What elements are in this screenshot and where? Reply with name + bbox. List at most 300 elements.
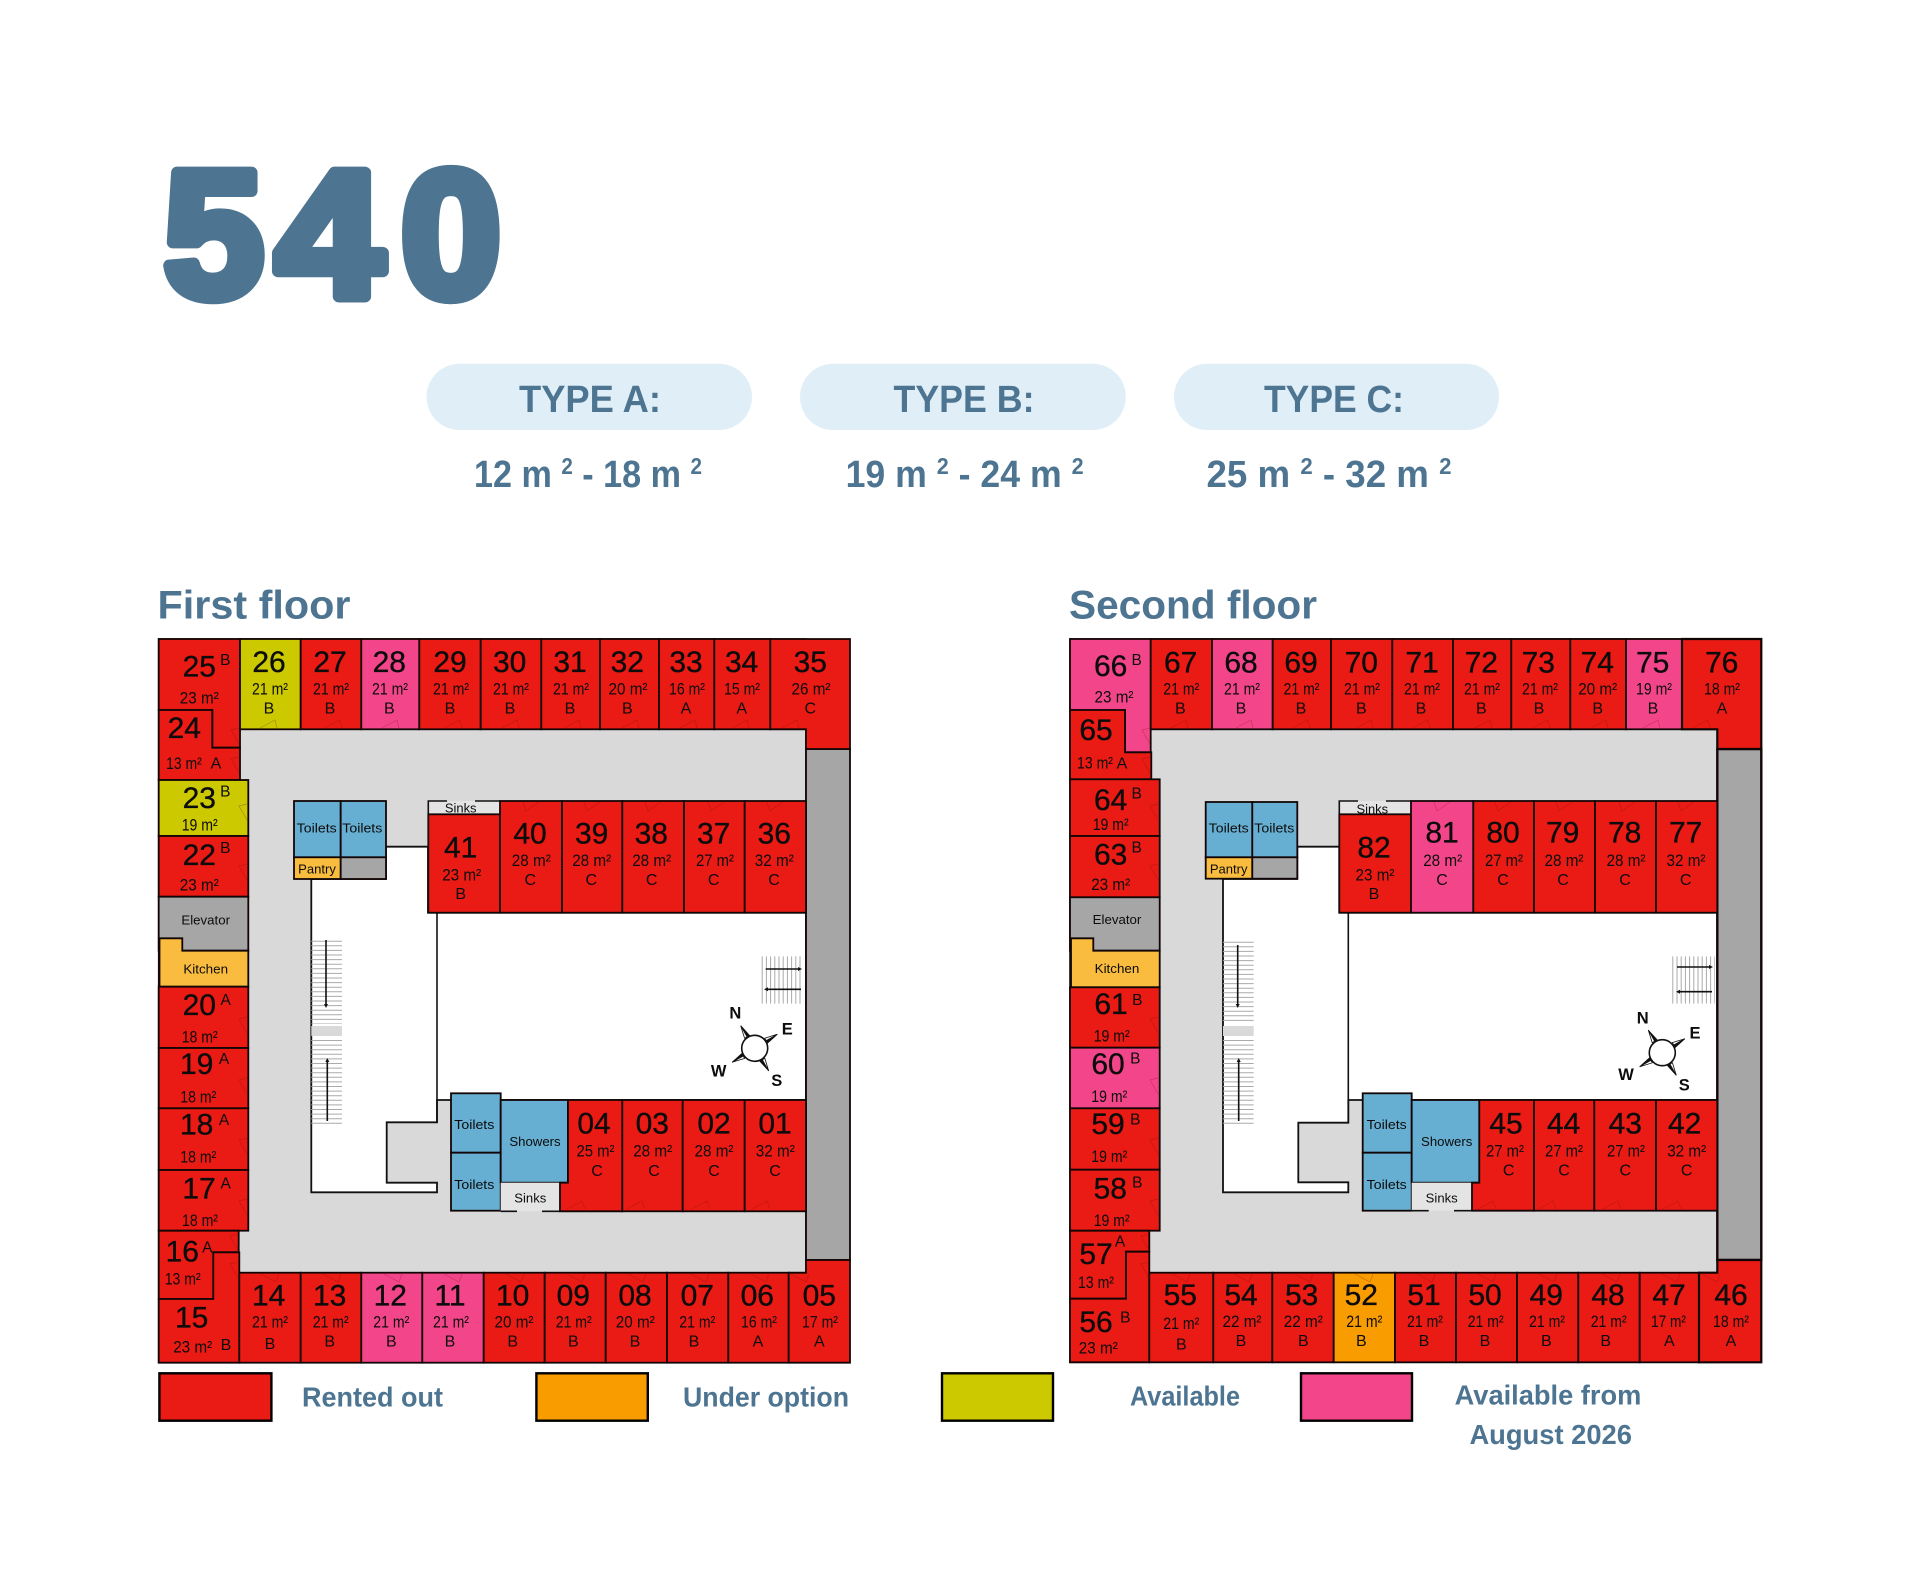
room 73 xyxy=(1511,639,1570,729)
sinks north: Sinks xyxy=(1356,801,1389,816)
room 38: C xyxy=(646,872,657,889)
room 36: C xyxy=(768,872,780,889)
door marks xyxy=(1141,720,1720,1282)
room 47: 17 m² xyxy=(1651,1312,1686,1331)
room 57: A xyxy=(1115,1234,1126,1251)
room 58: 58 xyxy=(1094,1172,1127,1205)
room 82 xyxy=(1339,814,1411,913)
room 20 xyxy=(159,987,248,1048)
room 63: 23 m² xyxy=(1091,875,1130,894)
room 40: 28 m² xyxy=(512,851,551,870)
compass: N xyxy=(1637,1009,1649,1027)
left stairs xyxy=(311,940,342,1124)
room 17 xyxy=(159,1170,248,1231)
room 36 xyxy=(745,801,806,913)
room 71: 21 m² xyxy=(1404,679,1440,698)
room 29: B xyxy=(445,700,455,717)
room 76 xyxy=(1682,639,1761,749)
courtyard xyxy=(1223,847,1717,1192)
room 39 xyxy=(562,801,622,913)
room 07 xyxy=(667,1273,728,1363)
room 44: 27 m² xyxy=(1545,1142,1583,1161)
room 66: 66 xyxy=(1094,650,1127,683)
sinks north xyxy=(1339,801,1411,825)
room 73: 21 m² xyxy=(1522,679,1558,698)
room 41 xyxy=(428,814,500,913)
room 82: 82 xyxy=(1357,831,1391,864)
room 65 xyxy=(1070,710,1151,779)
room 26: B xyxy=(264,700,274,717)
room 76: A xyxy=(1717,700,1728,717)
room 43 xyxy=(1594,1100,1656,1211)
room 73: 73 xyxy=(1522,647,1555,680)
room 60: 19 m² xyxy=(1091,1087,1128,1106)
room 37: C xyxy=(708,872,719,889)
room 51: 51 xyxy=(1407,1279,1441,1312)
room 53: 53 xyxy=(1285,1279,1318,1312)
elevator: Elevator xyxy=(181,912,231,927)
compass: S xyxy=(771,1072,782,1090)
room 46 xyxy=(1699,1260,1761,1362)
room 15: 15 xyxy=(175,1302,208,1335)
toilets south: Toilets xyxy=(1367,1117,1407,1132)
room 51: 21 m² xyxy=(1407,1312,1443,1331)
room 03: 28 m² xyxy=(633,1142,672,1161)
room 31 xyxy=(541,639,600,729)
room 16: 16 xyxy=(166,1236,199,1269)
room 60 xyxy=(1070,1048,1160,1108)
type B size range: - 24 m xyxy=(949,454,1072,496)
room 64: 19 m² xyxy=(1093,815,1129,834)
heading: second floor: Second floor xyxy=(1069,584,1317,628)
room 66 xyxy=(1070,639,1151,752)
room 51 xyxy=(1395,1273,1456,1362)
compass: S xyxy=(1679,1077,1690,1095)
room 11: B xyxy=(445,1334,455,1351)
room 12: 21 m² xyxy=(373,1313,410,1332)
room 33: A xyxy=(681,700,692,717)
room 34: 34 xyxy=(725,646,758,679)
room 56: B xyxy=(1120,1309,1130,1326)
room 48 xyxy=(1578,1273,1640,1362)
room 74: 74 xyxy=(1581,647,1614,680)
room 23: 23 xyxy=(183,782,216,815)
room 20: 18 m² xyxy=(182,1027,218,1046)
room 15: B xyxy=(221,1337,231,1354)
room 70: 70 xyxy=(1345,647,1378,680)
left stairs xyxy=(1223,942,1254,1124)
room 67 xyxy=(1151,639,1212,729)
room 39: C xyxy=(586,872,597,889)
room 29: 29 xyxy=(433,646,467,679)
room 14: 14 xyxy=(252,1280,285,1313)
room 33 xyxy=(659,639,714,729)
toilets south xyxy=(1363,1093,1412,1211)
toilet block north xyxy=(294,801,386,879)
room 34: 15 m² xyxy=(724,679,760,698)
compass: E xyxy=(1689,1024,1701,1042)
toilets south: Toilets xyxy=(454,1177,495,1192)
room 04: 04 xyxy=(577,1107,611,1140)
room 12 xyxy=(361,1273,422,1363)
room 49: 49 xyxy=(1530,1279,1563,1312)
room 14: 21 m² xyxy=(252,1313,288,1332)
first floor plan xyxy=(159,639,850,1363)
legend: under option xyxy=(536,1373,849,1421)
room 76: 18 m² xyxy=(1704,679,1740,698)
room 61 xyxy=(1070,987,1160,1048)
room 02: C xyxy=(708,1163,720,1180)
type C size range: 25 m xyxy=(1206,454,1293,496)
room 54: B xyxy=(1236,1333,1246,1350)
corridor xyxy=(1070,639,1717,1362)
showers: Showers xyxy=(1421,1134,1473,1149)
type C pill: TYPE C: xyxy=(1264,379,1404,421)
room 63 xyxy=(1070,836,1160,897)
room 77: C xyxy=(1680,872,1691,889)
room 13 xyxy=(301,1273,361,1363)
compass: E xyxy=(782,1021,793,1039)
room 59: B xyxy=(1130,1111,1140,1128)
right stairs xyxy=(762,967,803,991)
room 64: B xyxy=(1132,785,1142,802)
room 44: 44 xyxy=(1547,1107,1580,1140)
room 26 xyxy=(240,639,301,729)
room 17: 17 xyxy=(182,1173,216,1206)
room 13: B xyxy=(324,1334,335,1351)
room 60: 60 xyxy=(1091,1048,1125,1081)
right stairs xyxy=(1672,965,1715,994)
room 73: B xyxy=(1534,700,1544,717)
room 06 xyxy=(728,1273,789,1363)
room 10: 20 m² xyxy=(494,1313,534,1332)
room 55 xyxy=(1149,1273,1213,1362)
room 25: 25 xyxy=(183,651,216,684)
compass xyxy=(711,1005,793,1090)
compass: W xyxy=(711,1063,727,1081)
room 01: 32 m² xyxy=(756,1142,795,1161)
room 22: 23 m² xyxy=(180,876,219,895)
room 18: A xyxy=(219,1112,230,1129)
room 18: 18 m² xyxy=(180,1147,217,1166)
room 77: 77 xyxy=(1669,817,1702,850)
room 16: A xyxy=(202,1239,213,1256)
showers xyxy=(1412,1100,1479,1183)
type A size range: 12 m xyxy=(474,454,561,496)
room 53 xyxy=(1272,1273,1334,1362)
room 09 xyxy=(545,1273,606,1363)
room 61: B xyxy=(1132,992,1142,1009)
room 71: B xyxy=(1416,700,1426,717)
room 07: 07 xyxy=(681,1280,714,1313)
room 68: B xyxy=(1236,700,1246,717)
room 45: 45 xyxy=(1489,1107,1523,1140)
toilet block north: Toilets xyxy=(342,820,383,835)
room 79 xyxy=(1534,801,1595,913)
room 07: B xyxy=(689,1334,699,1351)
room 28: 21 m² xyxy=(372,679,408,698)
room 19: A xyxy=(219,1051,230,1068)
legend: available from august 2026: Available from xyxy=(1455,1380,1641,1411)
service column xyxy=(1717,749,1761,1260)
type B size range: 2 xyxy=(1072,453,1084,479)
room 11: 11 xyxy=(434,1280,466,1313)
type A pill: TYPE A: xyxy=(519,379,661,421)
room 50: B xyxy=(1480,1333,1490,1350)
room 80 xyxy=(1473,801,1534,913)
room 20: 20 xyxy=(183,989,216,1022)
room 81: 81 xyxy=(1425,817,1459,850)
room 79: 28 m² xyxy=(1544,851,1584,870)
room 04: 25 m² xyxy=(576,1142,615,1161)
room 48: B xyxy=(1600,1333,1611,1350)
legend: rented out xyxy=(159,1373,443,1421)
room 25: B xyxy=(220,652,230,669)
room 02: 28 m² xyxy=(694,1142,734,1161)
room 79: 79 xyxy=(1546,817,1579,850)
room 32 xyxy=(600,639,659,729)
room 47: 47 xyxy=(1652,1279,1686,1312)
room 27: B xyxy=(325,700,335,717)
room 14 xyxy=(239,1273,301,1363)
room 71 xyxy=(1392,639,1453,729)
room 38: 28 m² xyxy=(632,851,671,870)
legend: available: Available xyxy=(1130,1381,1240,1412)
room 52: 52 xyxy=(1345,1279,1378,1312)
room 30: 21 m² xyxy=(493,679,529,698)
room 11 xyxy=(422,1273,484,1363)
room 35: C xyxy=(805,700,816,717)
room 78 xyxy=(1595,801,1656,913)
room 13: 21 m² xyxy=(313,1313,349,1332)
room 61: 61 xyxy=(1094,988,1128,1021)
room 22 xyxy=(159,836,248,897)
room 36: 36 xyxy=(758,817,791,850)
room 42: 32 m² xyxy=(1667,1142,1706,1161)
room 49 xyxy=(1517,1273,1578,1362)
room 12: 12 xyxy=(374,1280,407,1313)
room 40: C xyxy=(525,872,536,889)
room 59: 59 xyxy=(1091,1108,1125,1141)
room 09: B xyxy=(568,1334,579,1351)
title: 540: 0 xyxy=(401,134,501,336)
room 43: 43 xyxy=(1609,1107,1642,1140)
room 02 xyxy=(683,1100,745,1211)
room 10: B xyxy=(507,1334,518,1351)
room 55: 55 xyxy=(1164,1279,1197,1312)
showers: Showers xyxy=(509,1134,561,1149)
room 27: 21 m² xyxy=(313,679,349,698)
room 03: C xyxy=(648,1163,660,1180)
room 81: C xyxy=(1436,872,1448,889)
service column xyxy=(806,749,850,1260)
title: 540: 5 xyxy=(164,134,264,336)
toilet block north: Toilets xyxy=(1254,820,1295,835)
room 67: 21 m² xyxy=(1163,679,1200,698)
type C size range: 2 xyxy=(1300,453,1313,479)
room 43: 27 m² xyxy=(1607,1142,1645,1161)
room 52: 21 m² xyxy=(1346,1312,1383,1331)
corridor xyxy=(159,639,806,1363)
elevator: Elevator xyxy=(1093,912,1142,927)
room 34: A xyxy=(736,700,747,717)
room 45 xyxy=(1472,1100,1534,1211)
room 03 xyxy=(622,1100,683,1211)
room 08 xyxy=(606,1273,667,1363)
type A size range: - 18 m xyxy=(573,454,691,496)
room 41: 23 m² xyxy=(442,866,481,885)
room 25: 23 m² xyxy=(180,688,219,707)
room 16 xyxy=(159,1231,239,1299)
room 44: C xyxy=(1558,1163,1570,1180)
room 63: B xyxy=(1132,839,1142,856)
room 01 xyxy=(745,1100,806,1211)
room 52 xyxy=(1334,1273,1395,1362)
room 50 xyxy=(1456,1273,1517,1362)
room 75: B xyxy=(1648,700,1658,717)
room 82: 23 m² xyxy=(1356,866,1395,885)
room 51: B xyxy=(1419,1333,1429,1350)
room 39: 39 xyxy=(575,817,608,850)
room 20: A xyxy=(221,992,232,1009)
room 40: 40 xyxy=(513,817,547,850)
room 68 xyxy=(1212,639,1273,729)
room 37 xyxy=(684,801,745,913)
type B pill: TYPE B: xyxy=(894,379,1034,421)
room 19 xyxy=(159,1048,248,1108)
room 34 xyxy=(714,639,770,729)
room 72: 72 xyxy=(1465,647,1498,680)
room 30: 30 xyxy=(493,646,526,679)
room 08: B xyxy=(630,1334,640,1351)
room 67: B xyxy=(1175,700,1186,717)
room 69: 69 xyxy=(1284,647,1318,680)
room 82: B xyxy=(1369,886,1379,903)
legend: available xyxy=(942,1373,1240,1421)
room 64: 64 xyxy=(1094,784,1127,817)
room 19: 18 m² xyxy=(180,1087,217,1106)
room 26: 21 m² xyxy=(252,679,288,698)
room 28 xyxy=(361,639,419,729)
room 52: B xyxy=(1356,1333,1367,1350)
room 08: 08 xyxy=(618,1280,652,1313)
kitchen: Kitchen xyxy=(183,961,228,976)
room 30: B xyxy=(505,700,515,717)
room 35: 26 m² xyxy=(792,679,831,698)
room 57 xyxy=(1070,1231,1149,1299)
room 10: 10 xyxy=(496,1280,529,1313)
kitchen: Kitchen xyxy=(1095,961,1139,976)
room 77: 32 m² xyxy=(1666,851,1706,870)
room 14: B xyxy=(265,1336,275,1353)
room 05 xyxy=(789,1260,850,1363)
type C size range: - 32 m xyxy=(1313,454,1439,496)
room 72: 21 m² xyxy=(1464,679,1500,698)
room 54 xyxy=(1213,1273,1272,1362)
type A pill xyxy=(427,364,752,430)
room 07: 21 m² xyxy=(679,1312,716,1331)
room 66: 23 m² xyxy=(1094,687,1134,706)
room 64 xyxy=(1070,779,1160,836)
room 69: 21 m² xyxy=(1284,679,1320,698)
room 41: B xyxy=(455,886,466,903)
room 63: 63 xyxy=(1094,838,1127,871)
room 61: 19 m² xyxy=(1094,1027,1130,1046)
type C size range: 2 xyxy=(1439,453,1452,479)
room 39: 28 m² xyxy=(572,851,611,870)
kitchen xyxy=(1071,938,1160,987)
room 32: 20 m² xyxy=(608,679,648,698)
courtyard xyxy=(311,847,806,1192)
sinks south: Sinks xyxy=(1426,1191,1458,1206)
room 60: B xyxy=(1130,1050,1140,1067)
room 24: 13 m² xyxy=(166,754,202,773)
showers xyxy=(501,1100,568,1183)
room 02: 02 xyxy=(697,1107,731,1140)
room 30 xyxy=(481,639,541,729)
legend: available from august 2026: August 2026 xyxy=(1469,1419,1632,1450)
sinks south: Sinks xyxy=(514,1191,547,1206)
room 72 xyxy=(1453,639,1511,729)
room 53: B xyxy=(1298,1333,1309,1350)
room 42: C xyxy=(1681,1163,1692,1180)
toilet block north: Toilets xyxy=(297,820,337,835)
room 78: 78 xyxy=(1608,817,1641,850)
room 03: 03 xyxy=(636,1107,669,1140)
sinks north: Sinks xyxy=(445,801,477,816)
room 05: 05 xyxy=(803,1280,836,1313)
room 74: B xyxy=(1592,700,1603,717)
title: 540 xyxy=(164,134,501,336)
legend: under option: Under option xyxy=(683,1382,849,1413)
room 05: 17 m² xyxy=(802,1312,838,1331)
room 18: 18 xyxy=(180,1109,213,1142)
room 49: 21 m² xyxy=(1529,1312,1565,1331)
room 41: 41 xyxy=(444,831,477,864)
room 25 xyxy=(159,639,240,748)
toilets south: Toilets xyxy=(1367,1177,1407,1192)
room 29 xyxy=(419,639,481,729)
room 70: 21 m² xyxy=(1344,679,1380,698)
toilets south xyxy=(451,1093,501,1211)
room 40 xyxy=(500,801,562,913)
room 77 xyxy=(1656,801,1717,913)
room 11: 21 m² xyxy=(433,1313,469,1332)
title: 540: 4 xyxy=(276,134,384,336)
room 45: 27 m² xyxy=(1486,1142,1524,1161)
room 75 xyxy=(1626,639,1682,729)
room 80: 27 m² xyxy=(1485,851,1523,870)
room 09: 21 m² xyxy=(556,1313,592,1332)
room 43: C xyxy=(1620,1163,1631,1180)
toilet block north: Toilets xyxy=(1209,820,1249,835)
type C pill xyxy=(1174,364,1499,430)
room 17: 18 m² xyxy=(182,1211,218,1230)
sinks south xyxy=(1412,1183,1472,1211)
elevator xyxy=(1070,897,1160,951)
room 17: A xyxy=(221,1175,232,1192)
room 65: 65 xyxy=(1079,714,1113,747)
room 50: 50 xyxy=(1468,1279,1502,1312)
toilet block north: Pantry xyxy=(1210,861,1248,876)
room 54: 22 m² xyxy=(1222,1312,1262,1331)
room 46: 18 m² xyxy=(1713,1312,1749,1331)
room 67: 67 xyxy=(1164,647,1197,680)
second floor plan xyxy=(1070,639,1761,1362)
room 81: 28 m² xyxy=(1423,851,1462,870)
room 42: 42 xyxy=(1668,1107,1701,1140)
room 65: A xyxy=(1117,755,1128,772)
